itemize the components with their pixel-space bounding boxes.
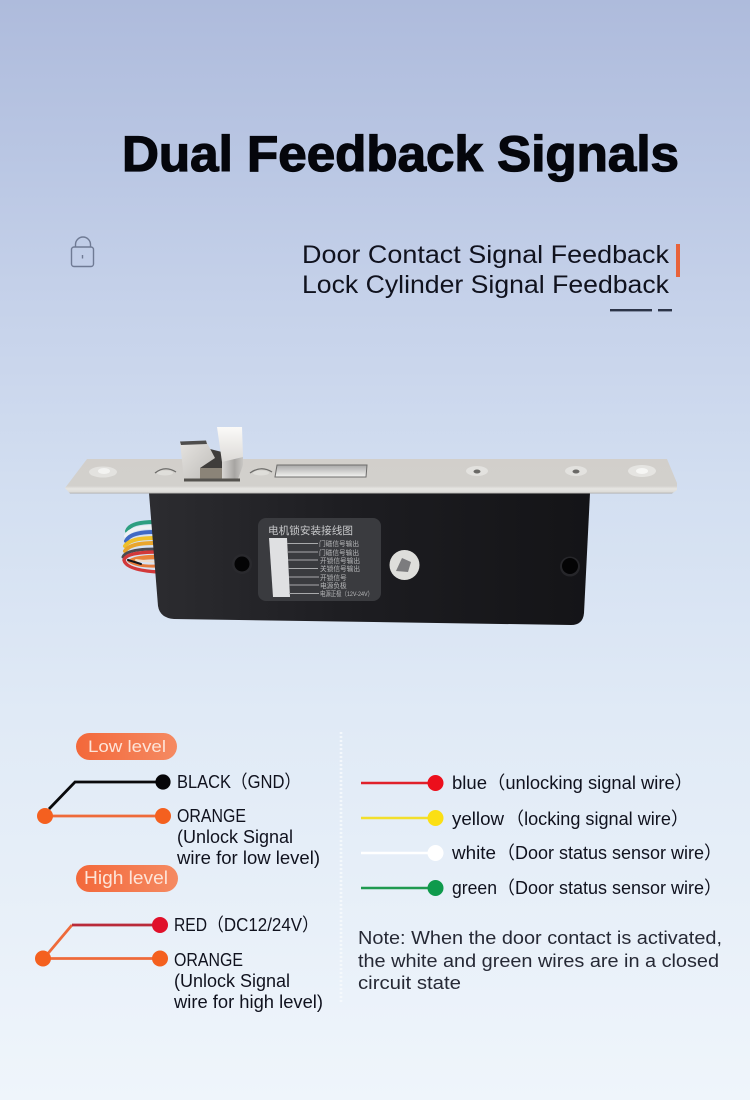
legend row: green: green [452,878,497,898]
legend row: white [361,843,722,863]
title: Dual Feedback Signals [122,126,679,182]
low level labels: wire for low level) [176,848,320,868]
wiring label: 关锁信号输出 [320,564,360,573]
legend row: blue [361,773,693,793]
wiring label: 开锁信号输出 [320,556,360,565]
legend row: green [361,878,722,898]
low level labels: （GND） [231,772,301,792]
diagram: high level wires [35,917,168,966]
high level labels: （DC12/24V） [207,915,319,935]
dash accent [610,309,672,311]
legend row: white: white [451,843,496,863]
badge: low level: Low level [88,737,166,756]
note: circuit state [358,973,461,993]
legend row: blue: （unlocking signal wire） [487,773,693,793]
wiring label: 电源负极 [320,581,347,590]
dotted divider [340,732,342,1003]
faceplate slot [275,465,367,477]
wiring label: 门磁信号输出 [319,539,359,548]
high level labels: (Unlock Signal [174,971,290,991]
wiring label: 电源正极（12V-24V） [320,589,373,598]
legend row: blue: blue [452,773,487,793]
wiring label: 电机锁安装接线图 [268,524,353,537]
subtitle [302,241,670,299]
faceplate screw holes [89,465,656,478]
low level labels: BLACK [177,772,231,792]
low level labels [176,772,320,868]
high level labels [173,915,323,1012]
legend row: yellow: yellow [452,809,505,829]
legend row: yellow: （locking signal wire） [506,809,689,829]
badge: high level: High level [84,868,168,888]
faceplate [65,459,677,494]
product photo: electric bolt lock [65,427,677,625]
legend row: white: （Door status sensor wire） [497,843,722,863]
wiring label [258,518,381,601]
high level labels: ORANGE [174,950,243,970]
high level labels: RED [174,915,207,935]
note: the white and green wires are in a closed [358,951,719,971]
high level labels: wire for high level) [173,992,323,1012]
latch [180,427,243,482]
badge: low level [76,733,177,760]
subtitle: Door Contact Signal Feedback [302,241,670,269]
legend row: green: （Door status sensor wire） [497,878,722,898]
panel: low / high level wiring [35,733,323,1012]
diagram: low level wires [37,774,171,824]
wiring label: 开锁信号 [320,573,347,582]
panel: signal wire legend [361,773,722,898]
wiring label: 门磁信号输出 [319,548,359,557]
low level labels: ORANGE [177,806,246,826]
black housing [149,493,590,625]
orange accent bar [676,244,680,277]
legend row: yellow [361,809,689,829]
low level labels: (Unlock Signal [177,827,293,847]
note: Note: When the door contact is activated, [358,928,722,948]
subtitle: Lock Cylinder Signal Feedback [302,271,670,299]
badge: high level [76,865,178,892]
adjustment screw [390,550,420,580]
note [358,928,722,993]
icon: padlock [72,237,94,266]
mounting holes [232,554,580,576]
coloured wires [123,522,158,572]
